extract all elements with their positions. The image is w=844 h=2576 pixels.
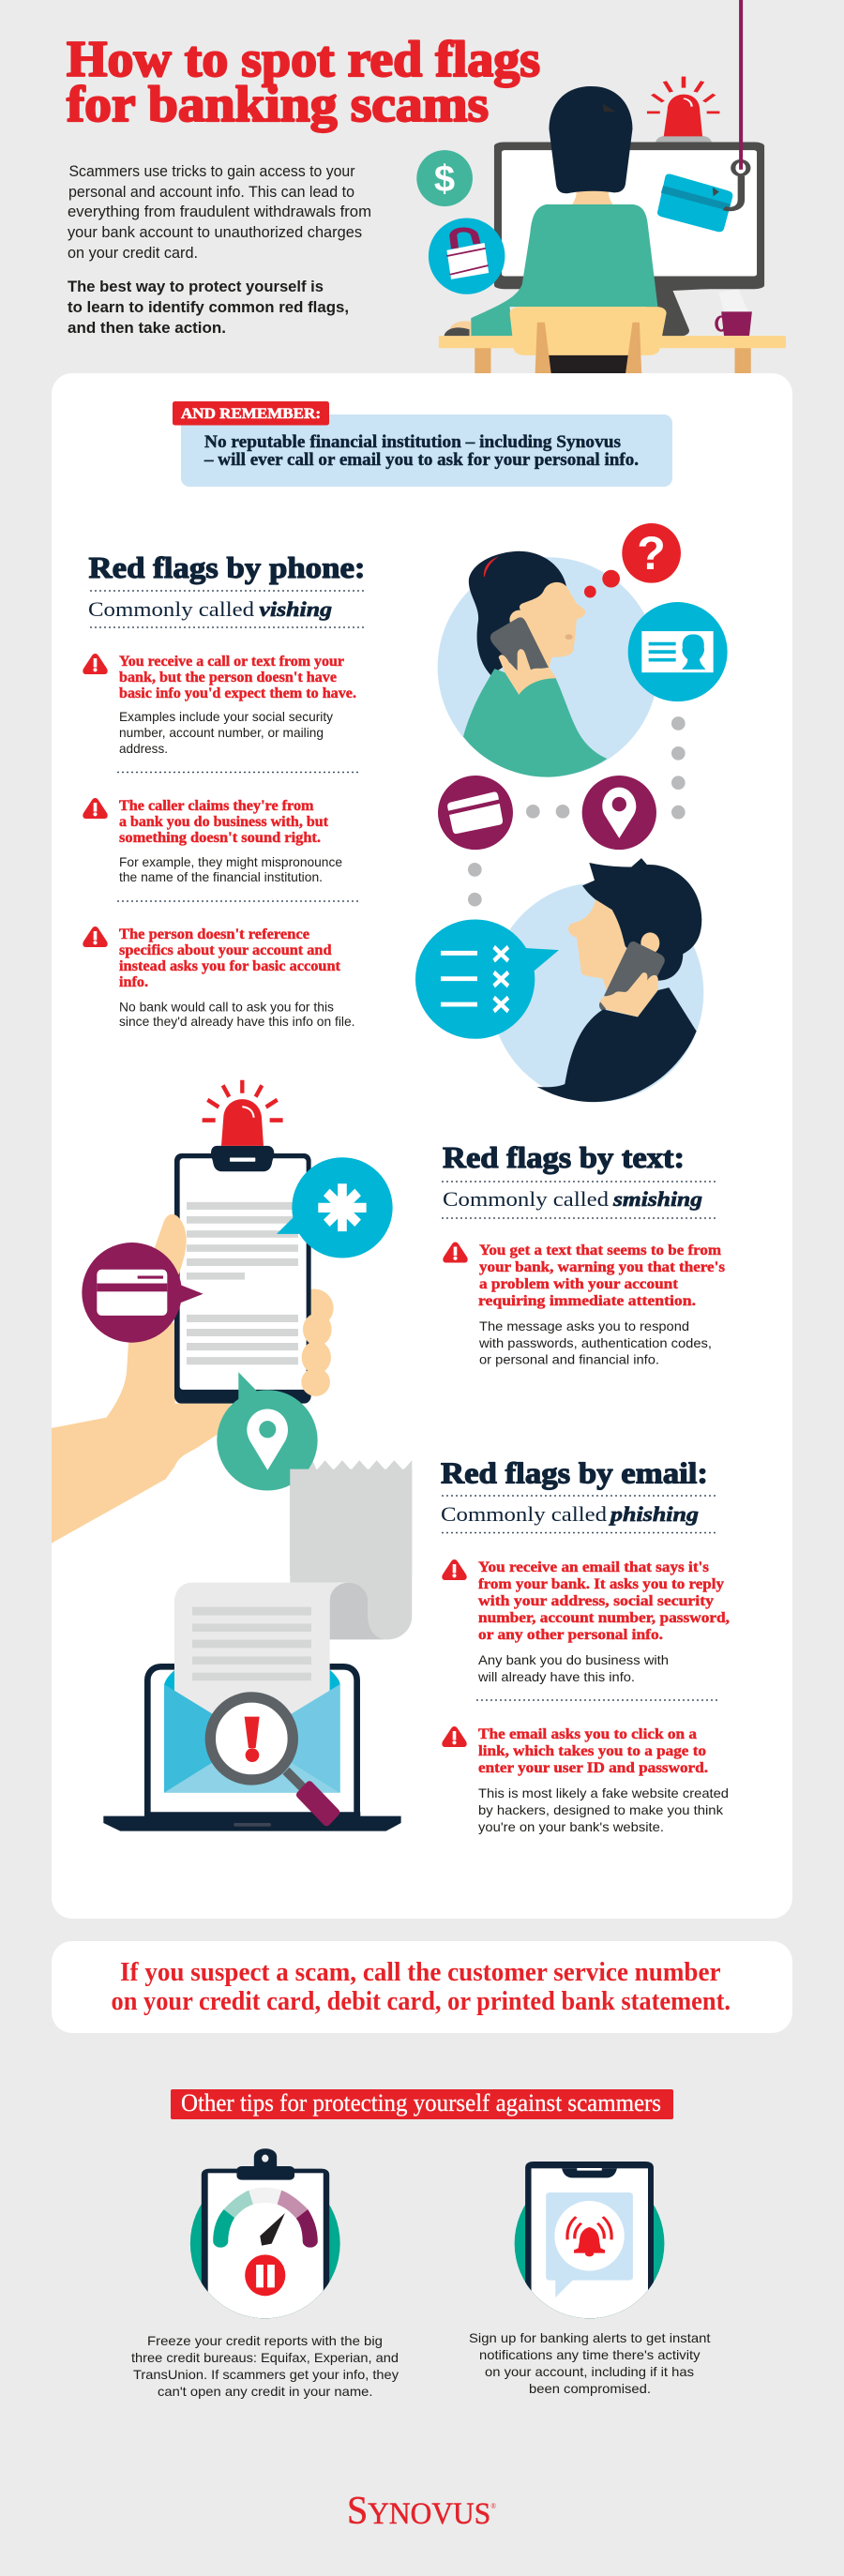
section: red flags by email bbox=[441, 1455, 730, 1834]
fingers and thumb bbox=[155, 1214, 332, 1396]
icon: padlock bubble bbox=[429, 218, 505, 294]
smartphone bbox=[174, 1146, 311, 1404]
callout: and remember: No reputable financial institution – including Synovus bbox=[204, 432, 621, 452]
question mark: ? bbox=[637, 527, 666, 580]
title bbox=[67, 31, 540, 132]
intro paragraph: everything from fraudulent withdrawals from bbox=[68, 203, 371, 220]
icon: warning 2 bbox=[442, 1726, 467, 1747]
detail 2 bbox=[478, 1785, 729, 1834]
siren bbox=[203, 1080, 283, 1146]
red flag 1: bank, but the person doesn't have bbox=[119, 670, 337, 685]
logo: Synovus: SYNOVUS bbox=[347, 2490, 497, 2533]
detail 2: by hackers, designed to make you think bbox=[478, 1802, 724, 1817]
envelope flaps bbox=[164, 1684, 340, 1793]
red flag 2: The email asks you to click on a bbox=[478, 1726, 697, 1742]
detail: The message asks you to respond bbox=[479, 1318, 689, 1333]
red flag 1: You receive a call or text from your bbox=[119, 654, 344, 670]
speech bubble: credit card bbox=[82, 1243, 203, 1343]
hand palm bbox=[52, 1289, 334, 1544]
icon: id card bbox=[628, 602, 728, 701]
red flag 2: something doesn't sound right. bbox=[119, 830, 321, 846]
red flag 2: link, which takes you to a page to bbox=[478, 1743, 706, 1759]
desk bbox=[439, 336, 786, 375]
callout: and remember bbox=[173, 401, 672, 487]
red flag 3: specifics about your account and bbox=[119, 942, 332, 958]
icon: coffee cup bbox=[716, 311, 752, 336]
detail 1 bbox=[119, 709, 333, 756]
red flag bbox=[478, 1243, 725, 1309]
red flag 1 bbox=[478, 1559, 730, 1643]
icon: location pin bbox=[582, 776, 656, 850]
section: red flags by phone bbox=[83, 550, 366, 1029]
illustration: laptop with phishing email and magnifier bbox=[103, 1469, 412, 1831]
intro paragraph: Scammers use tricks to gain access to your bbox=[69, 162, 355, 180]
tip: banking alerts: notifications any time there's activity bbox=[479, 2347, 700, 2362]
red flag: a problem with your account bbox=[479, 1276, 679, 1292]
detail 1: number, account number, or mailing bbox=[119, 725, 324, 740]
speech bubble: checklist with x marks bbox=[415, 919, 559, 1039]
panel: scam call to action bbox=[52, 1941, 792, 2033]
red flag 2 bbox=[119, 798, 329, 846]
laptop bbox=[103, 1666, 401, 1831]
tip: freeze credit bbox=[131, 2333, 399, 2399]
icon: dollar coin bbox=[416, 150, 473, 206]
red flag 1: You receive an email that says it's bbox=[478, 1559, 709, 1575]
red flag 2: enter your user ID and password. bbox=[478, 1760, 708, 1776]
tip: freeze credit: TransUnion. If scammers get your info, they bbox=[133, 2367, 399, 2382]
logo: Synovus: ® bbox=[490, 2502, 496, 2510]
icon: phone with alert bell bbox=[515, 2162, 664, 2332]
connector dots bbox=[468, 716, 686, 907]
man circle bbox=[490, 858, 703, 1102]
icon: warning 3 bbox=[83, 926, 108, 947]
detail bbox=[478, 1318, 712, 1367]
term: vishing: vishing bbox=[259, 597, 332, 621]
detail 1: address. bbox=[119, 741, 168, 756]
detail 3: since they'd already have this info on file. bbox=[119, 1014, 354, 1029]
detail 3: No bank would call to ask you for this bbox=[119, 1000, 334, 1015]
panel: scam call to action: If you suspect a scam, call the customer service number bbox=[120, 1957, 721, 1987]
subheading: smishing: Commonly called bbox=[443, 1187, 609, 1211]
speech bubble: asterisk password bbox=[277, 1157, 393, 1258]
detail 2 bbox=[119, 854, 342, 884]
red flag 3: The person doesn't reference bbox=[119, 926, 309, 942]
letter bbox=[174, 1583, 349, 1744]
subheading: vishing: Commonly called bbox=[88, 597, 254, 621]
tip: banking alerts: on your account, including if it has bbox=[485, 2364, 694, 2379]
red flag 3: info. bbox=[119, 974, 148, 990]
heading: email: Red flags by email: bbox=[441, 1455, 708, 1489]
panel: scam call to action: on your credit card, debit card, or printed bank statement. bbox=[111, 1986, 731, 2016]
icon: credit card bbox=[438, 776, 513, 850]
envelope back bbox=[164, 1670, 340, 1793]
red flag 2 bbox=[478, 1726, 708, 1776]
red flag 1: or any other personal info. bbox=[478, 1627, 663, 1643]
icon: warning 1 bbox=[442, 1559, 467, 1580]
person from behind bbox=[445, 86, 657, 336]
tip: freeze credit: three credit bureaus: Equifax, Experian, and bbox=[131, 2350, 399, 2365]
tip: freeze credit: Freeze your credit reports with the big bbox=[147, 2333, 383, 2348]
intro bold statement bbox=[68, 278, 349, 337]
woman circle bbox=[438, 551, 658, 777]
detail 2: This is most likely a fake website created bbox=[478, 1785, 729, 1800]
detail 1: Any bank you do business with bbox=[478, 1652, 669, 1667]
illustration: woman at computer with hook bbox=[416, 0, 786, 375]
red flag 1: basic info you'd expect them to have. bbox=[119, 685, 356, 701]
red flag 1: with your address, social security bbox=[478, 1593, 714, 1609]
intro paragraph: your bank account to unauthorized charges bbox=[68, 223, 362, 241]
magnifying glass with exclamation bbox=[210, 1697, 336, 1822]
term: phishing: phishing bbox=[609, 1502, 699, 1526]
icon: clipboard with credit gauge bbox=[190, 2148, 340, 2332]
intro bold statement: and then take action. bbox=[68, 319, 226, 337]
detail 2: For example, they might mispronounce bbox=[119, 854, 342, 869]
red flag 1: number, account number, password, bbox=[478, 1610, 730, 1626]
red flag 2: The caller claims they're from bbox=[119, 798, 314, 814]
dollar sign: $ bbox=[434, 158, 455, 200]
detail: with passwords, authentication codes, bbox=[478, 1335, 712, 1350]
tip: banking alerts: Sign up for banking alerts to get instant bbox=[469, 2330, 711, 2345]
intro paragraph bbox=[68, 162, 371, 262]
tip: banking alerts bbox=[469, 2330, 711, 2396]
detail: or personal and financial info. bbox=[479, 1352, 659, 1367]
title: for banking scams bbox=[67, 76, 489, 132]
heading: other tips: Other tips for protecting yourself against scammers bbox=[181, 2089, 661, 2117]
red flag 3 bbox=[119, 926, 341, 990]
red flag: requiring immediate attention. bbox=[478, 1293, 696, 1309]
icon: warning bbox=[443, 1242, 468, 1262]
heading: text: Red flags by text: bbox=[443, 1140, 685, 1174]
intro bold statement: to learn to identify common red flags, bbox=[68, 298, 349, 316]
intro paragraph: on your credit card. bbox=[68, 244, 198, 262]
subheading: phishing: Commonly called bbox=[441, 1502, 607, 1526]
thought bubbles bbox=[584, 523, 681, 598]
intro bold statement: The best way to protect yourself is bbox=[68, 278, 324, 295]
icon: monitor bbox=[494, 143, 764, 337]
red flag: You get a text that seems to be from bbox=[479, 1243, 722, 1258]
tip: freeze credit: can't open any credit in your name. bbox=[158, 2384, 373, 2399]
icon: siren bbox=[647, 77, 719, 143]
illustration: hand holding smartphone with siren bbox=[52, 1080, 412, 1575]
paper strip zigzag bbox=[290, 1460, 412, 1575]
detail 1: Examples include your social security bbox=[119, 709, 333, 724]
detail 1: will already have this info. bbox=[477, 1669, 635, 1684]
icon: credit card on hook bbox=[657, 0, 748, 232]
section: red flags by text bbox=[443, 1140, 725, 1367]
tip: banking alerts: been compromised. bbox=[529, 2381, 651, 2396]
red flag 3: instead asks you for basic account bbox=[119, 958, 341, 974]
detail 2: you're on your bank's website. bbox=[478, 1819, 664, 1834]
red flag 2: a bank you do business with, but bbox=[119, 814, 329, 830]
chair bbox=[510, 307, 667, 375]
heading: phone: Red flags by phone: bbox=[88, 550, 366, 584]
title: How to spot red flags bbox=[67, 31, 540, 87]
panel: main white card bbox=[52, 373, 792, 1919]
callout: and remember: – will ever call or email you to ask for your personal info. bbox=[203, 450, 639, 470]
paper scroll back bbox=[290, 1469, 412, 1639]
term: smishing: smishing bbox=[612, 1187, 702, 1211]
intro paragraph: personal and account info. This can lead to bbox=[68, 183, 354, 201]
red flag 1 bbox=[119, 654, 356, 701]
icon: warning 2 bbox=[83, 798, 108, 819]
red flag 1: from your bank. It asks you to reply bbox=[478, 1576, 724, 1592]
detail 1 bbox=[477, 1652, 669, 1684]
illustration: phone call between woman and scammer bbox=[415, 523, 728, 1102]
detail 3 bbox=[119, 1000, 354, 1029]
detail 2: the name of the financial institution. bbox=[119, 869, 323, 884]
red flag: your bank, warning you that there's bbox=[479, 1259, 725, 1275]
icon: warning 1 bbox=[83, 654, 108, 674]
speech bubble: location pin bbox=[217, 1372, 318, 1491]
callout: and remember: AND REMEMBER: bbox=[181, 406, 321, 422]
